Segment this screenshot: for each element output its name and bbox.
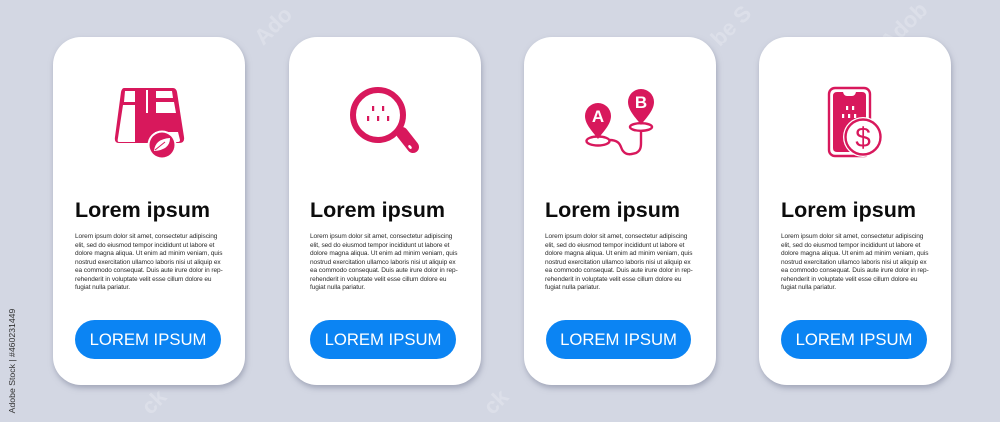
text block: elit, sed do eiusmod tempor incididunt ut labore et bbox=[781, 242, 920, 249]
text block: rehenderit in voluptate velit esse cillum dolore eu bbox=[75, 276, 211, 283]
text block: Lorem ipsum dolor sit amet, consectetur adipiscing bbox=[310, 233, 452, 240]
text block: elit, sed do eiusmod tempor incididunt ut labore et bbox=[545, 242, 684, 249]
heading: Lorem ipsum bbox=[310, 198, 445, 222]
panel: card 2 bbox=[289, 37, 481, 385]
text block bbox=[545, 233, 693, 291]
button: LOREM IPSUM bbox=[90, 330, 206, 349]
icon: phone with dollar coin bbox=[828, 86, 882, 158]
heading: Lorem ipsum bbox=[545, 198, 680, 222]
watermark: bottom left: ck bbox=[136, 384, 171, 419]
button: LOREM IPSUM bbox=[796, 330, 912, 349]
panel: card 1 bbox=[53, 37, 245, 385]
text block: dolore magna aliqua. Ut enim ad minim veniam, quis bbox=[545, 250, 692, 257]
text block: ea commodo consequat. Duis aute irure dolor in rep- bbox=[545, 267, 693, 274]
text block: elit, sed do eiusmod tempor incididunt ut labore et bbox=[75, 242, 214, 249]
text block: ea commodo consequat. Duis aute irure dolor in rep- bbox=[310, 267, 458, 274]
button: LOREM IPSUM bbox=[325, 330, 441, 349]
button bbox=[310, 320, 456, 359]
text block: Lorem ipsum dolor sit amet, consectetur adipiscing bbox=[781, 233, 923, 240]
text block: Lorem ipsum dolor sit amet, consectetur adipiscing bbox=[545, 233, 687, 240]
text block bbox=[310, 233, 458, 291]
text block: fugiat nulla pariatur. bbox=[75, 284, 130, 291]
icon: delivery box with leaf bbox=[114, 88, 184, 158]
text block: rehenderit in voluptate velit esse cillum dolore eu bbox=[545, 276, 681, 283]
text block: Lorem ipsum dolor sit amet, consectetur adipiscing bbox=[75, 233, 217, 240]
text block: nostrud exercitation ullamco laboris nisi ut aliquip ex bbox=[545, 259, 691, 266]
heading: Lorem ipsum bbox=[781, 198, 916, 222]
button bbox=[781, 320, 927, 359]
watermark: top left gutter: Ado bbox=[249, 2, 297, 50]
text block: dolore magna aliqua. Ut enim ad minim veniam, quis bbox=[75, 250, 222, 257]
text block: fugiat nulla pariatur. bbox=[545, 284, 600, 291]
text block: fugiat nulla pariatur. bbox=[310, 284, 365, 291]
text block: nostrud exercitation ullamco laboris nisi ut aliquip ex bbox=[310, 259, 456, 266]
icon: phone with dollar coin: $ bbox=[855, 122, 871, 153]
text block bbox=[781, 233, 929, 291]
icon: route A to B: A bbox=[592, 107, 604, 126]
text block: dolore magna aliqua. Ut enim ad minim veniam, quis bbox=[310, 250, 457, 257]
icon: route A to B: B bbox=[635, 93, 647, 112]
button bbox=[75, 320, 221, 359]
text block: rehenderit in voluptate velit esse cillum dolore eu bbox=[310, 276, 446, 283]
heading: Lorem ipsum bbox=[75, 198, 210, 222]
icon: route A to B bbox=[585, 89, 654, 156]
text block bbox=[75, 233, 223, 291]
text block: nostrud exercitation ullamco laboris nisi ut aliquip ex bbox=[75, 259, 221, 266]
text block: rehenderit in voluptate velit esse cillum dolore eu bbox=[781, 276, 917, 283]
text block: elit, sed do eiusmod tempor incididunt ut labore et bbox=[310, 242, 449, 249]
text block: ea commodo consequat. Duis aute irure dolor in rep- bbox=[75, 267, 223, 274]
icon: magnifier bbox=[350, 87, 419, 153]
panel: card 4 bbox=[759, 37, 951, 385]
text block: nostrud exercitation ullamco laboris nisi ut aliquip ex bbox=[781, 259, 927, 266]
text block: dolore magna aliqua. Ut enim ad minim veniam, quis bbox=[781, 250, 928, 257]
watermark: bottom middle: ck bbox=[478, 384, 513, 419]
watermark: top right gutter: be S bbox=[706, 0, 756, 51]
button: LOREM IPSUM bbox=[560, 330, 677, 349]
button bbox=[546, 320, 691, 359]
text block: ea commodo consequat. Duis aute irure dolor in rep- bbox=[781, 267, 929, 274]
stock credit text: Adobe Stock | #460231449 bbox=[7, 308, 17, 413]
panel: card 3 bbox=[524, 37, 716, 385]
text block: fugiat nulla pariatur. bbox=[781, 284, 836, 291]
